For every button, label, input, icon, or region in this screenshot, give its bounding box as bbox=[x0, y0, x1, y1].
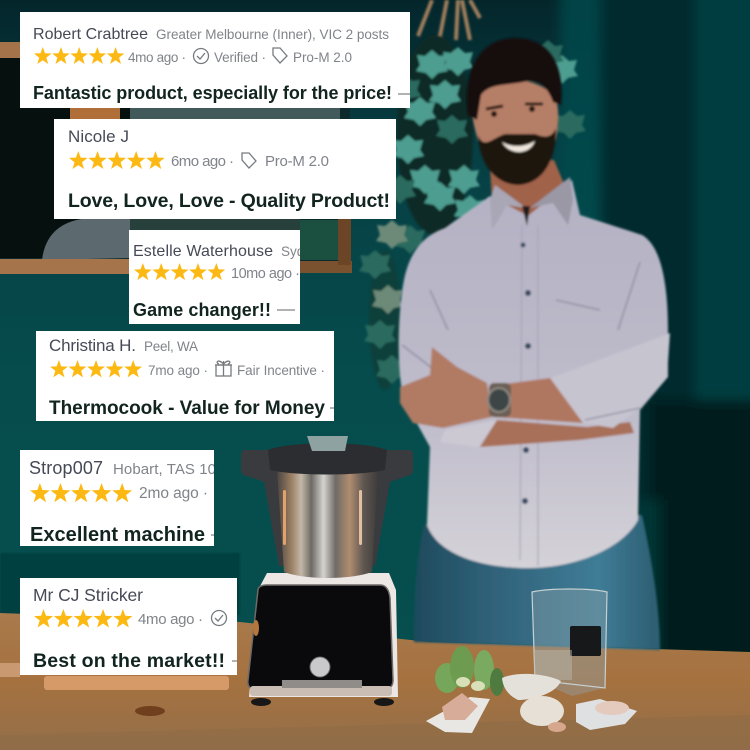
review card: Nicole J: 6mo ago · bbox=[171, 153, 234, 170]
review card: Christina H.: Fair Incentive · bbox=[237, 363, 325, 378]
shirt body bbox=[399, 180, 668, 568]
hair bbox=[467, 38, 562, 120]
steel bowl bbox=[277, 470, 378, 578]
head bbox=[472, 80, 558, 185]
rolled sleeve right bbox=[550, 333, 670, 428]
review card: Estelle Waterhouse: Syd bbox=[281, 244, 304, 259]
cooking machine bbox=[241, 436, 413, 706]
hand bbox=[400, 347, 492, 428]
review card: Strop007: 2mo ago · bbox=[139, 485, 208, 502]
lower forearm bbox=[480, 420, 634, 447]
review card: Robert Crabtree: Robert Crabtree bbox=[33, 26, 148, 43]
upper forearm bbox=[493, 378, 583, 423]
review card: Estelle Waterhouse bbox=[129, 230, 304, 324]
machine base bbox=[249, 573, 398, 697]
beard bbox=[478, 128, 556, 185]
review card: Christina H.: Thermocook - Value for Money bbox=[49, 398, 325, 419]
review card: Nicole J: Love, Love, Love - Quality Product! bbox=[68, 190, 390, 212]
review card: Strop007: Excellent machine bbox=[30, 524, 205, 546]
hanging ivy plant bbox=[359, 0, 586, 390]
review card: Mr CJ Stricker: Mr CJ Stricker bbox=[33, 585, 143, 605]
wall mirror with gold frame bbox=[0, 42, 352, 274]
review card: Strop007: Hobart, TAS 10 bbox=[113, 461, 216, 478]
eyes and brows bbox=[486, 104, 543, 109]
neck bbox=[490, 160, 570, 218]
review card: Robert Crabtree: Greater Melbourne (Inner), VIC 2 posts bbox=[156, 27, 389, 42]
review card: Strop007: Strop007 bbox=[29, 458, 103, 478]
food: glass bbox=[532, 589, 607, 696]
placket bbox=[520, 225, 538, 566]
review card: Robert Crabtree: Fantastic product, especially for the price! bbox=[33, 83, 392, 103]
review card: Christina H.: Christina H. bbox=[49, 336, 136, 355]
review card: Robert Crabtree: 4mo ago · bbox=[128, 50, 186, 65]
watch bbox=[489, 383, 511, 417]
machine feet bbox=[251, 698, 271, 706]
review card: Mr CJ Stricker bbox=[20, 578, 237, 675]
review card: Nicole J bbox=[54, 119, 396, 219]
review card: Christina H.: 7mo ago · bbox=[148, 363, 208, 378]
review card: Nicole J: Pro-M 2.0 bbox=[265, 153, 329, 170]
food: cucumbers and dishes bbox=[426, 646, 637, 733]
review card: Christina H. bbox=[36, 331, 334, 421]
bowl handles bbox=[241, 450, 413, 566]
smile bbox=[502, 141, 535, 152]
shirt folds bbox=[402, 262, 668, 370]
review card: Robert Crabtree: Verified · bbox=[214, 50, 266, 65]
review card: Estelle Waterhouse: Estelle Waterhouse bbox=[133, 243, 273, 260]
review card: Mr CJ Stricker: Best on the market!! bbox=[33, 650, 225, 672]
collar bbox=[490, 185, 526, 230]
table bbox=[0, 613, 750, 750]
jeans bbox=[414, 515, 660, 650]
review card: Robert Crabtree: Pro-M 2.0 bbox=[293, 50, 352, 65]
review card: Nicole J: Nicole J bbox=[68, 127, 129, 146]
review card: Strop007 bbox=[20, 450, 216, 546]
rolled cuff left bbox=[440, 420, 497, 447]
review card: Estelle Waterhouse: 10mo ago · bbox=[231, 266, 300, 282]
lid bbox=[268, 443, 387, 474]
review card: Robert Crabtree bbox=[20, 12, 410, 108]
man bbox=[399, 38, 670, 650]
review card: Christina H.: Peel, WA bbox=[144, 339, 198, 354]
review card: Mr CJ Stricker: 4mo ago · bbox=[138, 611, 203, 628]
railing in wall shadow bbox=[0, 553, 240, 615]
review card: Estelle Waterhouse: Game changer!! bbox=[133, 300, 271, 320]
